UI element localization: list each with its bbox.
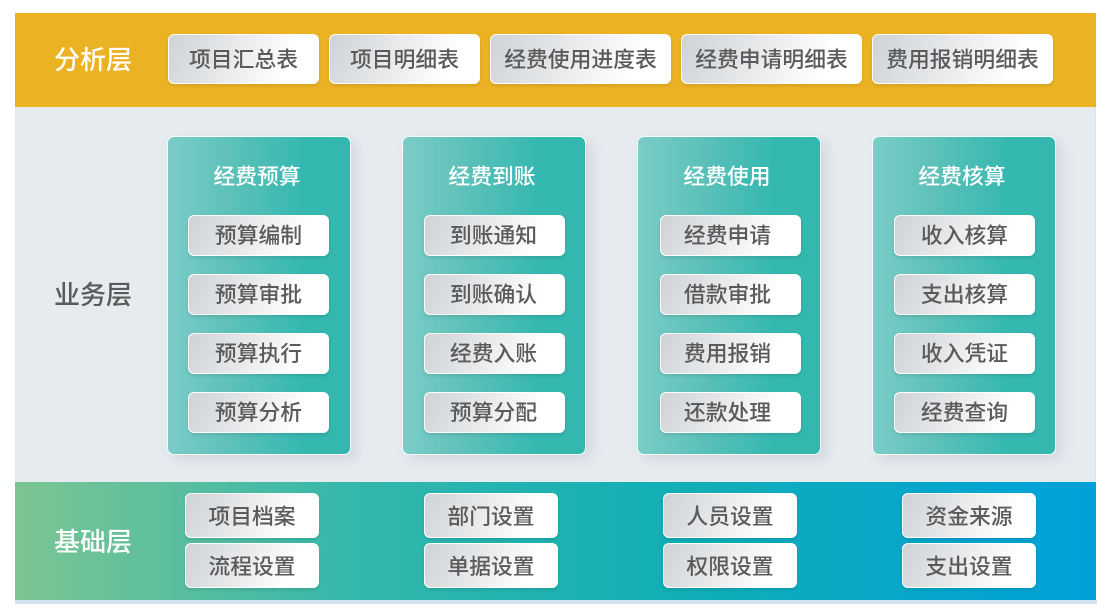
item: 预算编制 [215, 223, 302, 248]
item [424, 215, 565, 256]
item [902, 493, 1036, 538]
item: 单据设置 [447, 554, 535, 579]
item: 支出设置 [925, 554, 1013, 579]
item: 预算执行 [215, 341, 302, 366]
report: budget application detail [681, 34, 862, 84]
item: 权限设置 [686, 554, 774, 579]
item [185, 493, 319, 538]
panel heading: 经费核算 [918, 164, 1006, 189]
item [660, 392, 801, 433]
item: 收入凭证 [921, 341, 1008, 366]
panel heading: 经费使用 [683, 164, 771, 189]
item [424, 392, 565, 433]
item [424, 493, 558, 538]
item: 支出核算 [921, 282, 1008, 307]
item: 还款处理 [684, 400, 771, 425]
item: 项目档案 [208, 504, 296, 529]
heading: foundation layer: 基础层 [54, 527, 132, 557]
item [663, 493, 797, 538]
item: 流程设置 [208, 554, 296, 579]
item: 部门设置 [447, 504, 535, 529]
item [424, 333, 565, 374]
panel: funds received [402, 136, 586, 455]
item: 经费申请 [684, 223, 771, 248]
item [660, 333, 801, 374]
report: budget usage progress: 经费使用进度表 [504, 47, 657, 72]
item [660, 274, 801, 315]
item: 预算分析 [215, 400, 302, 425]
panel: accounting [872, 136, 1056, 455]
item [894, 215, 1035, 256]
item [894, 392, 1035, 433]
heading: business layer: 业务层 [54, 280, 132, 310]
item [424, 543, 558, 588]
item [663, 543, 797, 588]
panel heading: 经费预算 [213, 164, 301, 189]
item: 资金来源 [925, 504, 1013, 529]
item [188, 215, 329, 256]
layer band: foundation [15, 482, 1096, 600]
report: reimbursement detail: 费用报销明细表 [886, 47, 1039, 72]
item [660, 215, 801, 256]
report: project detail [329, 34, 480, 84]
item [894, 333, 1035, 374]
item [424, 274, 565, 315]
panel: funds usage [637, 136, 821, 455]
item: 经费入账 [450, 341, 537, 366]
item: 预算审批 [215, 282, 302, 307]
panel heading: 经费到账 [448, 164, 536, 189]
item: 借款审批 [684, 282, 771, 307]
report: project detail: 项目明细表 [350, 47, 459, 72]
report: project summary: 项目汇总表 [189, 47, 298, 72]
layer band: business [15, 107, 1096, 482]
layer band: analysis [15, 13, 1096, 107]
item [185, 543, 319, 588]
panel: budget planning [167, 136, 351, 455]
item: 经费查询 [921, 400, 1008, 425]
item: 到账确认 [450, 282, 537, 307]
item: 预算分配 [450, 400, 537, 425]
report: budget application detail: 经费申请明细表 [695, 47, 848, 72]
item: 收入核算 [921, 223, 1008, 248]
item [902, 543, 1036, 588]
report: project summary [168, 34, 319, 84]
item [188, 333, 329, 374]
item [188, 392, 329, 433]
heading: analysis layer: 分析层 [54, 45, 132, 75]
report: budget usage progress [490, 34, 671, 84]
item [188, 274, 329, 315]
item: 费用报销 [684, 341, 771, 366]
item: 到账通知 [450, 223, 537, 248]
item [894, 274, 1035, 315]
item: 人员设置 [686, 504, 774, 529]
report: reimbursement detail [872, 34, 1053, 84]
